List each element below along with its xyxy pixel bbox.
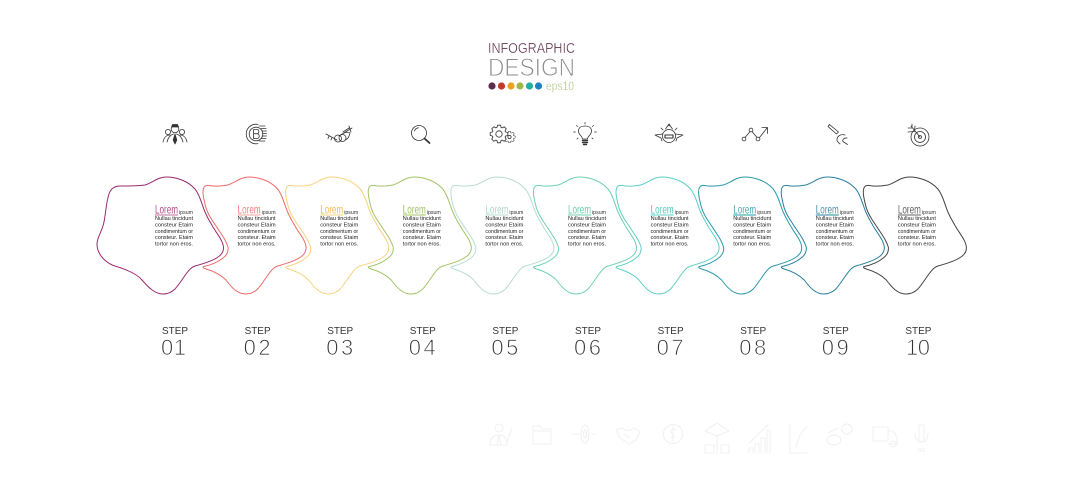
text: consteur Etaim [816,222,854,228]
text: tortor non eros. [898,242,936,248]
text: condimentum or [238,229,276,235]
icon: line chart arrow [742,128,768,141]
panel: step 4 [368,177,471,294]
text: consteur Etaim [155,222,194,228]
text: ipsum [757,210,771,216]
step 01 label: STEP [162,326,188,337]
icon: rotating object [915,425,928,454]
step 05 label: STEP [492,326,519,337]
text: ipsum [509,210,523,216]
step 09 label: STEP [823,326,849,337]
icon: rotating object: 360 [917,448,926,454]
text: Lorem [733,204,756,216]
text: consteur Etaim [568,222,607,228]
icon: magnifier [412,126,430,143]
text: tortor non eros. [733,242,771,248]
text: Lorem [403,204,426,216]
panel: step 10 [863,177,966,294]
step 04 label: STEP [410,326,436,337]
icon: delivery truck [873,427,897,447]
step 08 label: 08 [739,335,766,360]
blob outline [203,177,306,294]
text: condimentum or [568,229,606,235]
text: tortor non eros. [568,242,606,248]
text: Lorem [651,204,674,216]
icon: tree and houses [705,423,729,454]
text: Nullau tincidunt [816,216,854,222]
step 07 label: STEP [658,326,684,337]
step 10 label [905,326,932,360]
faint icon row [490,423,928,454]
panel: step 3 [286,177,389,294]
step 06 label: STEP [575,326,601,337]
text: tortor non eros. [651,242,689,248]
panel: step 7 [616,177,719,294]
text: Lorem [238,204,261,216]
colour dots [488,82,542,90]
text: Nullau tincidunt [568,216,607,222]
icon: folder [533,426,551,444]
text: Nullau tincidunt [485,216,524,222]
icon: tool [828,124,848,144]
text: consteur. Etaim [651,235,689,241]
text [485,204,524,248]
text: tortor non eros. [155,242,193,248]
text: consteur Etaim [733,222,772,228]
text: Lorem [898,204,921,216]
step 02 label: STEP [245,326,271,337]
step 08 label: STEP [740,326,767,337]
step 03 label: STEP [327,326,354,337]
step 10 label: 10 [906,335,930,360]
heading: design: DESIGN [488,54,575,82]
text: ipsum [427,210,441,216]
heading: infographic: INFOGRAPHIC [488,41,575,57]
panel: step 1 [97,177,224,294]
text: tortor non eros. [485,242,523,248]
text [403,204,441,248]
text: consteur Etaim [651,222,689,228]
text: ipsum [592,210,606,216]
text: Nullau tincidunt [238,216,276,222]
text: Lorem [816,204,839,216]
text: consteur. Etaim [485,235,524,241]
text: condimentum or [155,229,193,235]
blob outline [699,177,802,294]
text: ipsum [922,210,936,216]
text: consteur. Etaim [816,235,854,241]
step 06 label: 06 [574,335,601,360]
step 01 label [161,326,188,360]
blob outline [286,177,389,294]
icon: target [908,124,929,146]
icon: handshake [616,428,640,444]
text: tortor non eros. [816,242,854,248]
icon: bitcoin [246,124,266,144]
text: condimentum or [485,229,524,235]
blob outline [781,177,884,294]
blob outline [616,177,719,294]
text: Lorem [320,204,343,216]
text: ipsum [179,210,193,216]
text: Nullau tincidunt [898,216,936,222]
panel: step 8 [699,177,802,294]
panel: step 9 [781,177,884,294]
icon: handshake lever [326,126,352,142]
step 02 label: 02 [244,335,271,360]
blob outline [368,177,471,294]
text [155,204,194,248]
text [816,204,854,248]
text: consteur Etaim [238,222,276,228]
text: tortor non eros. [238,242,276,248]
text: tortor non eros. [320,242,358,248]
text [651,204,689,248]
icon: winged sun [655,124,683,142]
text: tortor non eros. [403,242,441,248]
icon: gears [490,125,515,143]
step 10 label: STEP [905,326,932,337]
step 07 label: 07 [657,335,684,360]
icon: light bulb [574,122,596,144]
text: consteur. Etaim [155,235,194,241]
text: Nullau tincidunt [403,216,441,222]
title [488,41,575,93]
label: eps10: eps10 [546,79,574,93]
text: Nullau tincidunt [651,216,689,222]
blob outline [97,177,224,294]
text: consteur Etaim [403,222,441,228]
icon: coins [827,424,852,445]
text: consteur. Etaim [403,235,441,241]
icon: line graph [790,425,807,453]
text: condimentum or [898,229,936,235]
step labels [161,326,932,360]
icon: arrow target [572,425,595,443]
text: Nullau tincidunt [320,216,359,222]
text: consteur. Etaim [238,235,276,241]
step 09 label: 09 [822,335,849,360]
panel: step 2 [203,177,306,294]
blob outline [533,177,636,294]
text [898,204,936,248]
text: ipsum [262,210,276,216]
text: condimentum or [816,229,854,235]
text: ipsum [344,210,358,216]
blob outline [451,177,554,294]
text: condimentum or [733,229,771,235]
step 04 label: 04 [409,335,436,360]
text: Lorem [485,204,508,216]
text [320,204,359,248]
icon: person with tool [490,424,512,445]
text: consteur. Etaim [568,235,607,241]
text: Nullau tincidunt [155,216,194,222]
text: consteur Etaim [898,222,936,228]
step 05 label: 05 [491,335,518,360]
text [568,204,607,248]
blob outline [863,177,966,294]
step 03 label: 03 [326,335,353,360]
icon: money cycle [664,424,682,444]
text [733,204,772,248]
text: consteur. Etaim [733,235,772,241]
text: Lorem [155,204,178,216]
text: consteur Etaim [485,222,524,228]
text: condimentum or [403,229,441,235]
text: Nullau tincidunt [733,216,772,222]
panel: step 5 [451,177,554,294]
icon: bar chart [749,425,770,453]
text: consteur. Etaim [320,235,359,241]
text: ipsum [675,210,689,216]
text: consteur Etaim [320,222,359,228]
text: consteur. Etaim [898,235,936,241]
text: condimentum or [651,229,689,235]
icon: team [163,124,187,144]
text [238,204,276,248]
panel: step 6 [533,177,636,294]
text: ipsum [840,210,854,216]
text: condimentum or [320,229,358,235]
step 01 label: 01 [161,335,186,360]
text: Lorem [568,204,591,216]
